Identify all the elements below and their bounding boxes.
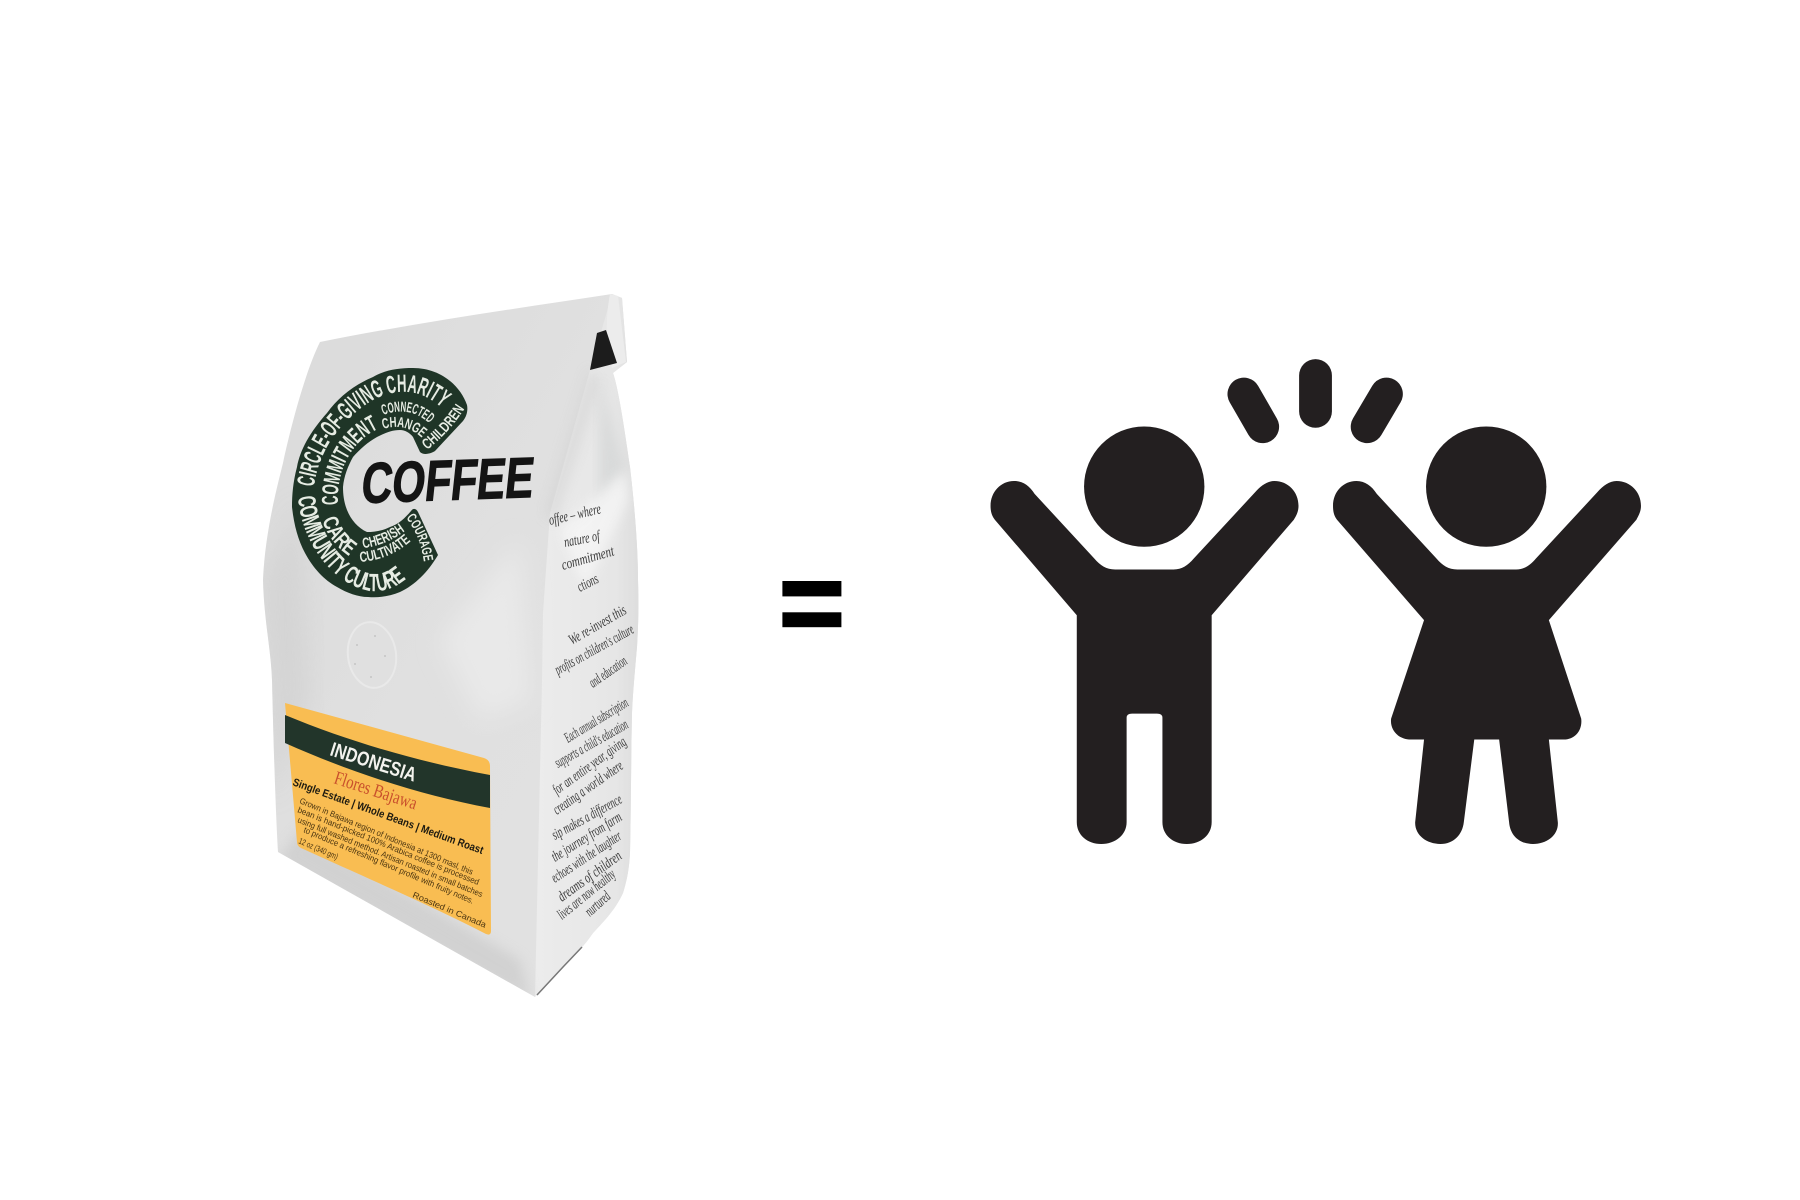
product label <box>285 703 491 935</box>
icon: boy <box>991 426 1299 844</box>
icon: two children high-fiving <box>991 376 1641 844</box>
coffee bag <box>263 294 638 997</box>
side panel story text: the journey from farm <box>549 809 625 865</box>
logo word: courage: COURAGE <box>408 514 434 562</box>
logo word: change: CHANGE <box>382 416 428 438</box>
side panel story text: Each annual subscription <box>561 695 631 747</box>
side panel story text: creating a world where <box>550 758 627 818</box>
logo word: cultivate: CULTIVATE <box>360 534 410 562</box>
logo word: commitment: COMMITMENT <box>322 414 376 504</box>
label description: Grown in Bajawa region of Indonesia at 1300 masl, this <box>298 796 475 877</box>
side panel story text: We re-invest this <box>566 603 630 648</box>
side panel story text: offee – where <box>547 501 603 529</box>
side panel story text: nurtured <box>582 888 614 920</box>
side panel story text <box>547 501 637 923</box>
logo word: circle-of-giving charity: CIRCLE-OF-GIVING CHARITY <box>297 374 452 486</box>
side panel story text: echoes with the laughter <box>548 828 625 886</box>
coffee wordmark: COFFEE <box>359 446 537 516</box>
side panel story text: lives are now healthy <box>554 867 619 923</box>
side panel story text: and education <box>586 654 631 691</box>
label farm name: Flores Bajawa <box>331 768 420 814</box>
bag side gusset <box>535 444 638 996</box>
side panel story text: nature of <box>563 528 602 551</box>
label orange background <box>285 703 491 935</box>
label description: to produce a refreshing flavor profile with fruity notes. <box>302 825 475 906</box>
logo: word-cloud letter C <box>292 368 468 598</box>
logo word: care: CARE <box>324 516 358 556</box>
bag silhouette with shading <box>250 280 650 1010</box>
logo word: community culture: COMMUNITY CULTURE <box>298 496 406 592</box>
icon: celebration rays <box>1244 376 1386 427</box>
side panel story text: sip makes a difference <box>549 792 625 843</box>
equals sign <box>782 581 841 627</box>
side panel story text: ctions <box>575 571 601 596</box>
logo word: cherish: CHERISH <box>362 523 404 548</box>
bag fold dark opening <box>590 330 617 370</box>
side panel story text: dreams of children <box>555 848 625 905</box>
logo C shape <box>292 368 467 597</box>
infographic canvas <box>263 294 1641 997</box>
label origin: Indonesia: INDONESIA <box>327 739 419 787</box>
side panel story text: supports a child's education <box>552 717 631 771</box>
side panel story text: commitment <box>560 543 617 574</box>
bag top fold <box>607 294 626 368</box>
logo word: children: CHILDREN <box>422 404 464 448</box>
bag bottom corner seam <box>537 947 582 995</box>
degassing valve <box>344 619 400 691</box>
side panel story text: for an entire year, giving <box>550 734 630 798</box>
soft creases <box>263 370 628 1000</box>
label bean details: Single Estate | Whole Beans | Medium Roast <box>291 777 485 857</box>
label description: 12 oz (340 gm) <box>297 836 340 862</box>
label green band <box>285 715 490 808</box>
label description: using full washed method. Artisan roasted in small batches <box>296 815 484 899</box>
label description: Roasted in Canada <box>411 890 488 930</box>
side panel story text: profits on children's culture <box>552 622 637 679</box>
label description: bean is hand-picked 100% Arabica coffee is processed <box>296 805 481 887</box>
icon: girl <box>1333 426 1641 844</box>
label description <box>296 796 488 930</box>
logo word: connected: CONNECTED <box>381 402 434 422</box>
